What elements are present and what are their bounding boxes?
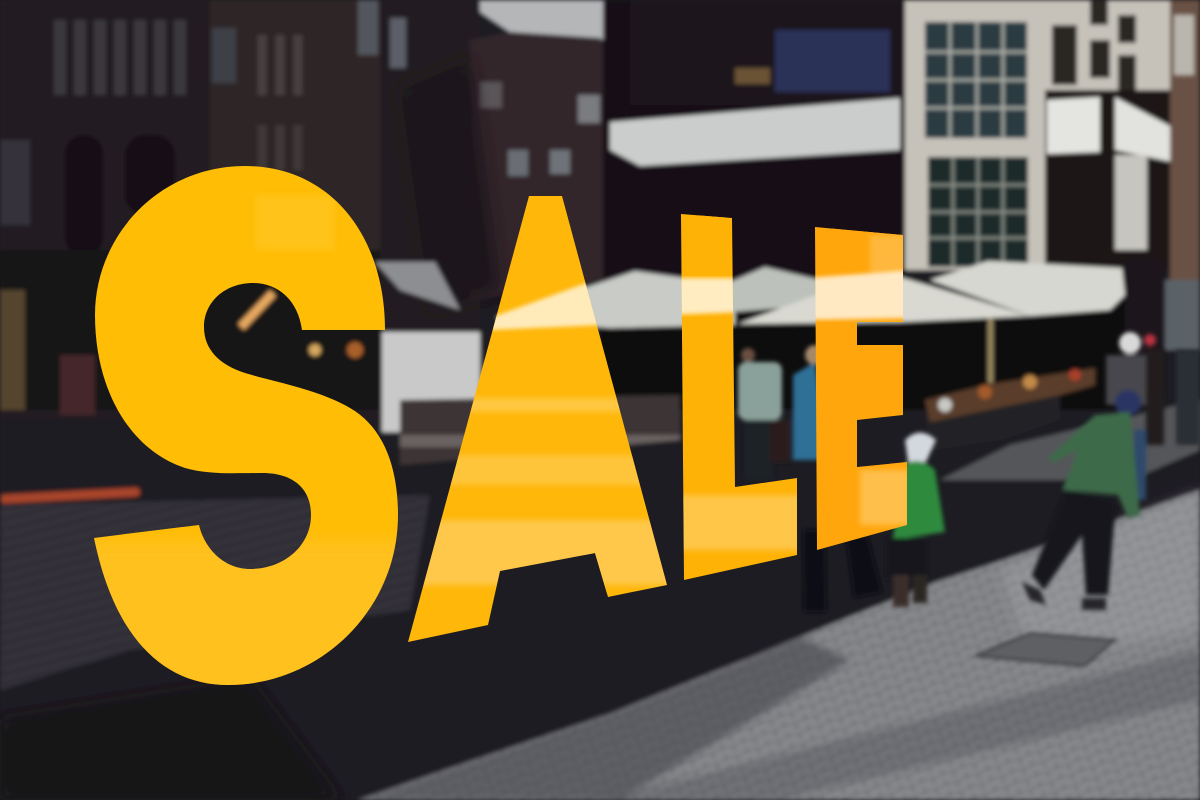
- paved pedestrian area: [357, 490, 1200, 800]
- letter L: [681, 214, 797, 580]
- building: light corner block: [905, 0, 1187, 270]
- letter L: L: [686, 82, 802, 686]
- lights seen through the S counter: [238, 290, 363, 358]
- cafe interior under umbrellas: [600, 300, 1130, 410]
- SALE window lettering: [94, 166, 907, 685]
- people: [738, 332, 1200, 612]
- letter E: [815, 227, 907, 550]
- letter E: E: [822, 113, 922, 619]
- sky: [462, 0, 650, 70]
- white umbrellas: [495, 261, 1125, 328]
- building: dark storefront: [603, 0, 908, 290]
- distant pedestrian with pale jacket: [738, 348, 790, 480]
- cobbled road strip: [0, 495, 430, 690]
- letter A: A: [427, 88, 653, 747]
- road: [0, 410, 1200, 800]
- market stall: [375, 262, 680, 465]
- adult in blue jacket: [793, 345, 882, 612]
- building: dark stone left: [0, 0, 480, 420]
- letter A: [408, 196, 667, 642]
- building: far right: [1160, 0, 1200, 350]
- right distant cafe terrace: [925, 318, 1095, 455]
- building: red brick centre: [400, 32, 612, 310]
- red light streak: [0, 487, 140, 504]
- letter S: S: [110, 80, 390, 772]
- manhole cover: [975, 633, 1115, 666]
- person in gray jacket behind the runner: [1106, 332, 1200, 500]
- running child, green coat: [1022, 390, 1141, 610]
- far sidewalk: [940, 400, 1200, 480]
- child in green jacket: [887, 432, 945, 607]
